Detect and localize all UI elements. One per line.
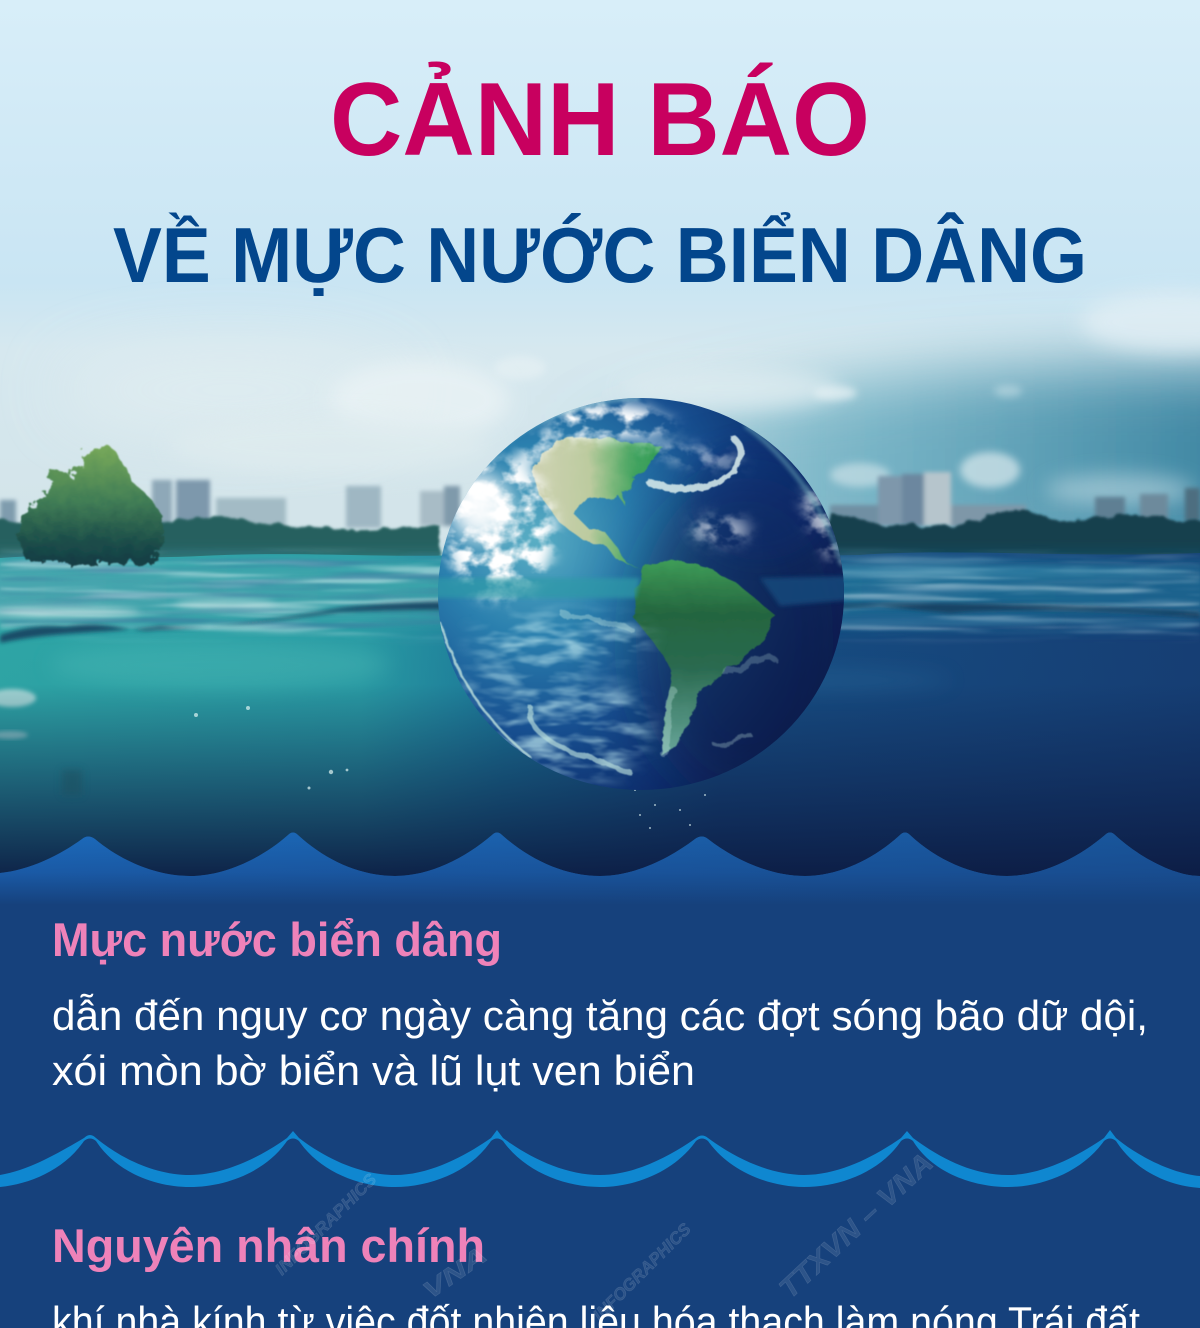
distant trees (0, 508, 1200, 566)
watermark: INFOGRAPHICS (271, 1169, 381, 1279)
continent: South America (633, 558, 777, 757)
watermark (271, 1147, 939, 1325)
body text: consequences: xói mòn bờ biển và lũ lụt ven biển (52, 1047, 695, 1094)
sky background (0, 0, 1200, 565)
title: CẢNH BÁO: CẢNH BÁO (330, 62, 870, 178)
clouds (60, 348, 1195, 506)
watermark: TTXVN – VNA (773, 1147, 939, 1304)
wave divider (0, 1130, 1200, 1188)
watermark: VNA (418, 1242, 492, 1305)
text block: Mực nước biển dâng (52, 913, 1148, 1094)
heading: Mực nước biển dâng: Mực nước biển dâng (52, 913, 502, 966)
text block: Nguyên nhân chính (52, 1219, 1140, 1328)
wave-edged blue panel (0, 832, 1200, 1328)
cloud masses (445, 403, 855, 600)
continent: North America (530, 437, 663, 570)
subtitle: VỀ MỰC NƯỚC BIỂN DÂNG: VỀ MỰC NƯỚC BIỂN DÂNG (113, 211, 1087, 299)
body text: consequences: dẫn đến nguy cơ ngày càng tăng các đợt sóng bão dữ dội, (52, 992, 1148, 1039)
skyline (0, 472, 1200, 530)
globe half submerged (430, 398, 855, 805)
swirl over the Atlantic (650, 438, 741, 488)
water line crossing the globe (430, 578, 640, 598)
bright cloud highlight (450, 473, 510, 541)
body text: consequences (52, 992, 1148, 1094)
water (0, 552, 1200, 882)
heading: Nguyên nhân chính: Nguyên nhân chính (52, 1219, 485, 1272)
underwater cloud bands (460, 616, 650, 780)
watermark: INFOGRAPHICS (589, 1219, 695, 1325)
light rim on the upper-right limb (745, 425, 842, 565)
tree in the water (18, 446, 164, 564)
